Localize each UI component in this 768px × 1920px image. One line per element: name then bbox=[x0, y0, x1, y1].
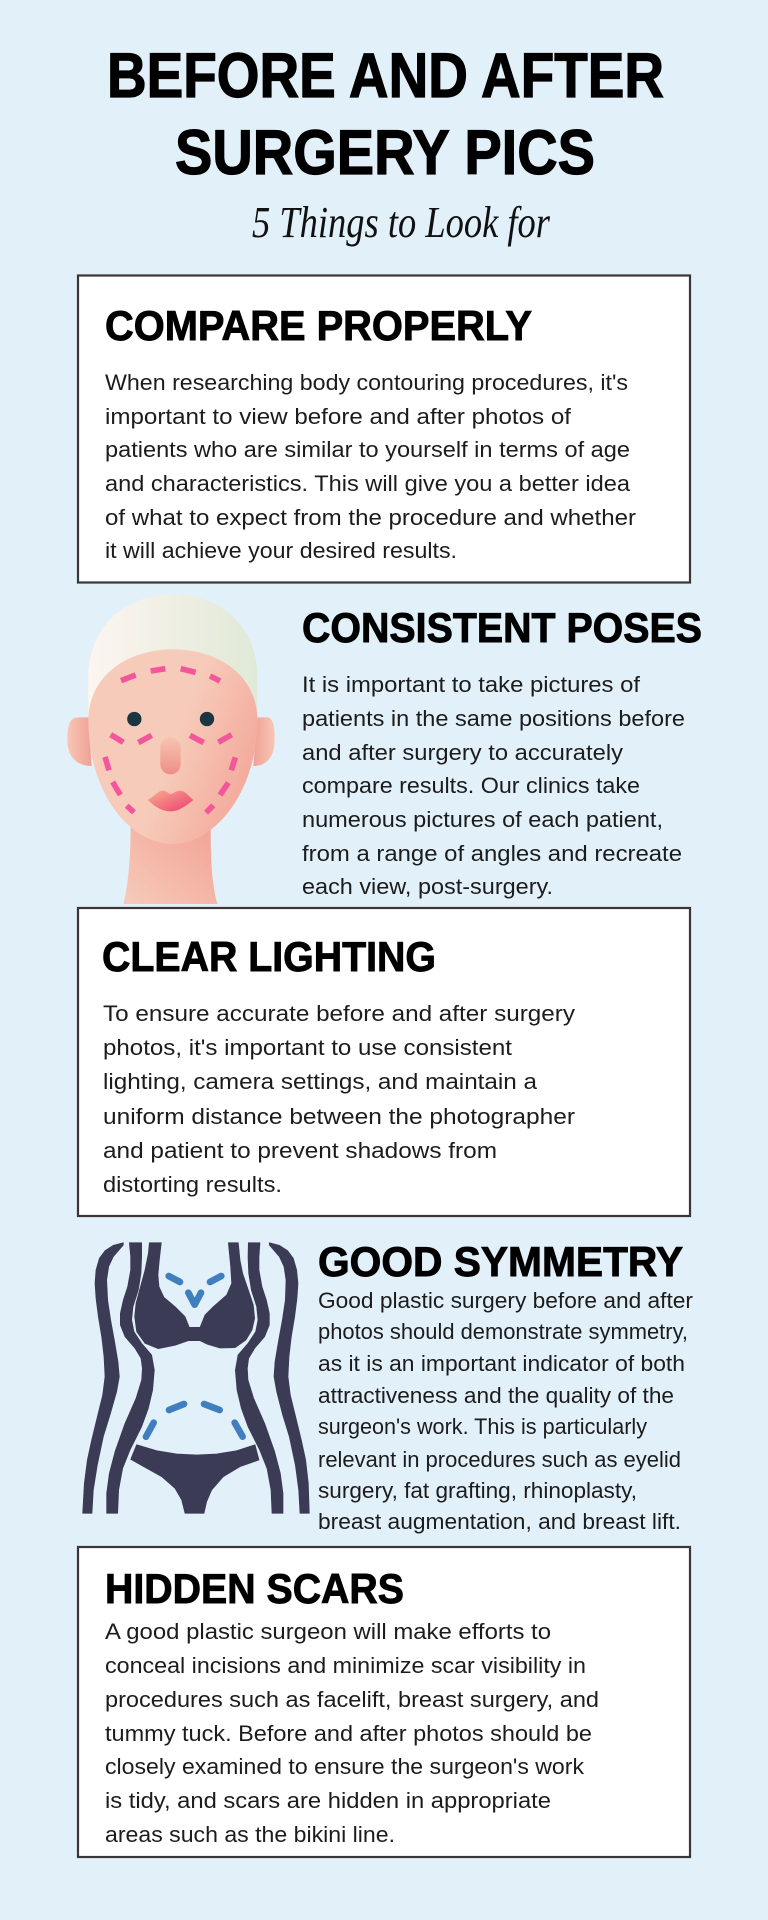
title: SURGERY PICS bbox=[175, 118, 595, 188]
text: hidden scars: closely examined to ensure the surgeon's work bbox=[105, 1754, 585, 1779]
text: compare properly bbox=[105, 370, 637, 563]
text: consistent poses: It is important to take pictures of bbox=[302, 672, 641, 697]
heading: consistent poses: CONSISTENT POSES bbox=[302, 604, 702, 651]
heading: compare properly: COMPARE PROPERLY bbox=[105, 302, 532, 349]
text: good symmetry: as it is an important indicator of both bbox=[318, 1351, 685, 1376]
text: hidden scars: A good plastic surgeon will make efforts to bbox=[105, 1619, 551, 1644]
text: good symmetry: surgery, fat grafting, rhinoplasty, bbox=[318, 1478, 637, 1503]
text: consistent poses: compare results. Our clinics take bbox=[302, 773, 640, 798]
text: clear lighting: uniform distance between the photographer bbox=[103, 1104, 576, 1129]
text: compare properly: When researching body contouring procedures, it's bbox=[105, 370, 628, 395]
title: BEFORE AND AFTER bbox=[107, 41, 664, 111]
text: consistent poses: and after surgery to accurately bbox=[302, 740, 624, 765]
text: consistent poses: from a range of angles and recreate bbox=[302, 841, 682, 866]
text: good symmetry: Good plastic surgery before and after bbox=[318, 1288, 694, 1313]
panel: clear lighting bbox=[78, 908, 690, 1216]
text: clear lighting: To ensure accurate before and after surgery bbox=[103, 1001, 576, 1026]
text: good symmetry: attractiveness and the quality of the bbox=[318, 1383, 674, 1408]
icon: face with dashed surgical lines bbox=[67, 594, 275, 904]
text: clear lighting: lighting, camera settings, and maintain a bbox=[103, 1069, 538, 1094]
text: good symmetry: relevant in procedures such as eyelid bbox=[318, 1447, 681, 1472]
text: compare properly: patients who are similar to yourself in terms of age bbox=[105, 437, 630, 462]
text: hidden scars: is tidy, and scars are hidden in appropriate bbox=[105, 1788, 551, 1813]
text: consistent poses: patients in the same positions before bbox=[302, 706, 685, 731]
text: hidden scars: tummy tuck. Before and after photos should be bbox=[105, 1721, 592, 1746]
text: hidden scars bbox=[105, 1619, 599, 1847]
text: hidden scars: procedures such as facelift, breast surgery, and bbox=[105, 1687, 599, 1712]
subtitle: 5 Things to Look for bbox=[252, 198, 551, 247]
text: consistent poses: numerous pictures of each patient, bbox=[302, 807, 663, 832]
text: good symmetry bbox=[318, 1288, 694, 1534]
panel: compare properly bbox=[78, 276, 690, 582]
text: clear lighting: photos, it's important to use consistent bbox=[103, 1035, 513, 1060]
icon: body outline with dashed markings bbox=[83, 1243, 309, 1513]
text: compare properly: it will achieve your desired results. bbox=[105, 538, 457, 563]
text: consistent poses bbox=[302, 672, 685, 899]
text: good symmetry: surgeon's work. This is particularly bbox=[318, 1414, 648, 1439]
heading: hidden scars: HIDDEN SCARS bbox=[105, 1565, 404, 1612]
text: compare properly: important to view before and after photos of bbox=[105, 404, 572, 429]
text: compare properly: of what to expect from the procedure and whether bbox=[105, 505, 637, 530]
text: hidden scars: areas such as the bikini line. bbox=[105, 1822, 395, 1847]
text: clear lighting bbox=[103, 1001, 576, 1197]
title bbox=[107, 41, 664, 188]
text: consistent poses: each view, post-surgery. bbox=[302, 874, 553, 899]
panel: hidden scars bbox=[78, 1547, 690, 1857]
text: clear lighting: and patient to prevent shadows from bbox=[103, 1138, 497, 1163]
text: good symmetry: breast augmentation, and breast lift. bbox=[318, 1509, 681, 1534]
heading: good symmetry: GOOD SYMMETRY bbox=[318, 1238, 683, 1285]
text: hidden scars: conceal incisions and minimize scar visibility in bbox=[105, 1653, 586, 1678]
text: good symmetry: photos should demonstrate symmetry, bbox=[318, 1319, 688, 1344]
text: compare properly: and characteristics. This will give you a better idea bbox=[105, 471, 631, 496]
text: clear lighting: distorting results. bbox=[103, 1172, 282, 1197]
heading: clear lighting: CLEAR LIGHTING bbox=[102, 933, 436, 980]
